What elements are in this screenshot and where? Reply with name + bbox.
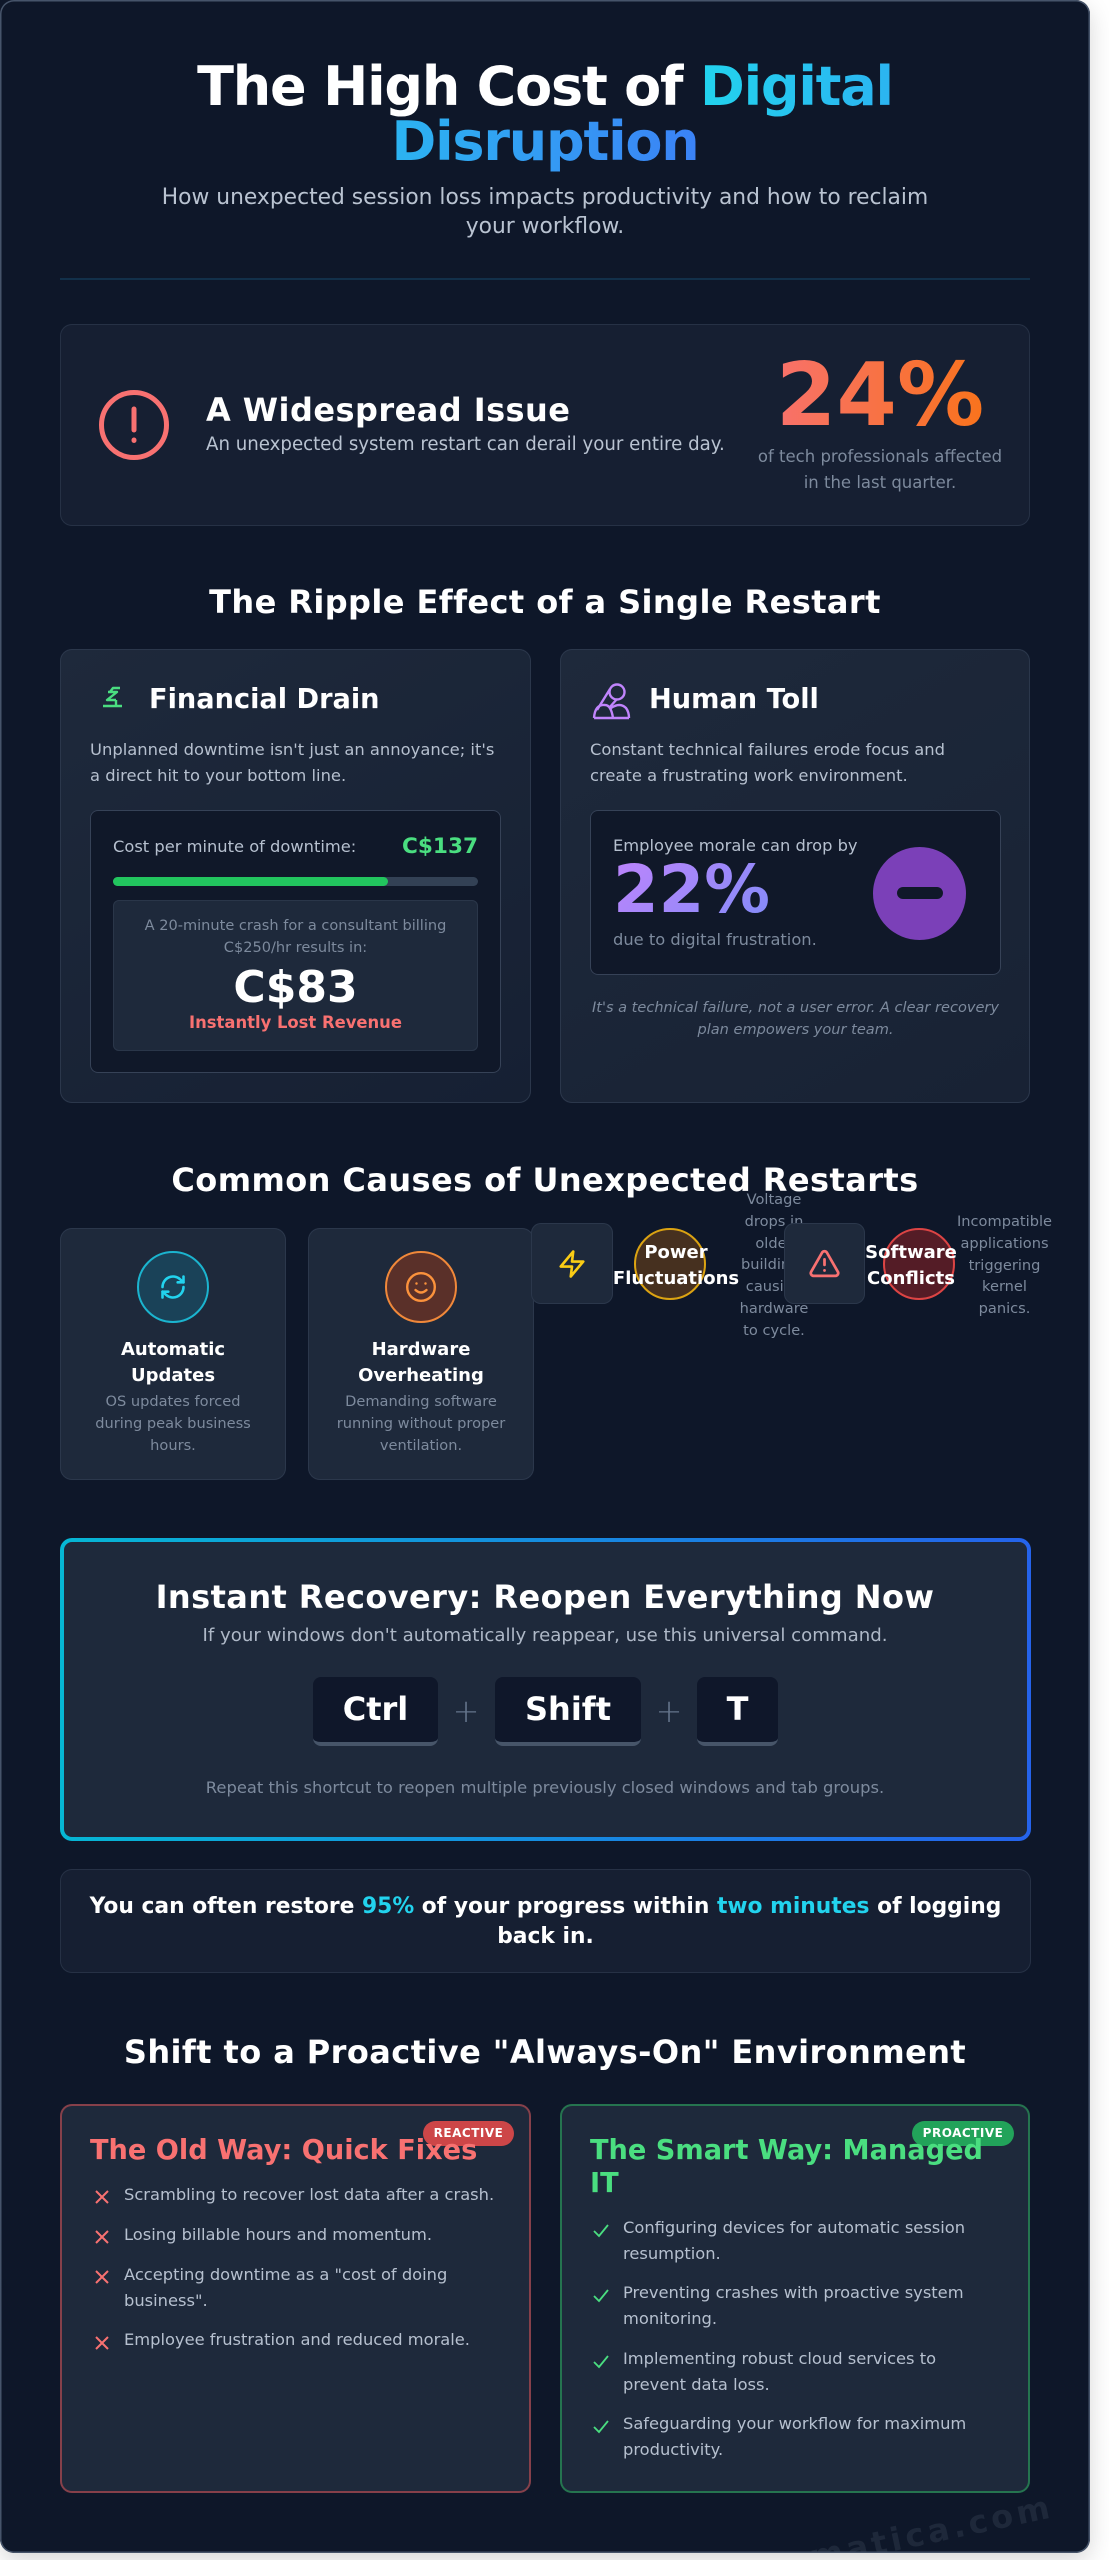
text: item: Accepting downtime as a "cost of doing bbox=[124, 2265, 447, 2284]
panel: morale stat bbox=[590, 810, 1001, 975]
text: hardware overheating description: Demanding software bbox=[345, 1393, 497, 1410]
panel: crash example bbox=[113, 900, 478, 1051]
text: recovery note: plan empowers your team. bbox=[697, 1021, 894, 1038]
text: item: Losing billable hours and momentum. bbox=[124, 2225, 432, 2244]
text: software conflicts description: triggering bbox=[969, 1257, 1040, 1274]
text: power fluctuations title: Fluctuations bbox=[613, 1268, 739, 1289]
text: automatic updates title bbox=[121, 1339, 225, 1386]
text: software conflicts description bbox=[957, 1213, 1052, 1317]
heading: the smart way bbox=[590, 2135, 983, 2199]
icon: lightning bbox=[559, 1250, 585, 1278]
heading: proactive environment: Shift to a Proactive "Always-On" Environment bbox=[124, 2033, 966, 2071]
stat: 24 percent: 24% bbox=[776, 344, 984, 446]
text: item: Configuring devices for automatic session bbox=[623, 2218, 965, 2237]
text: item bbox=[623, 2414, 966, 2459]
text: power fluctuations title bbox=[613, 1242, 739, 1289]
text: software conflicts description: applications bbox=[960, 1235, 1049, 1252]
badge: reactive: REACTIVE bbox=[434, 2126, 503, 2140]
text: recovery note: It's a technical failure, not a user error. A clear recovery bbox=[592, 999, 999, 1016]
text: item: productivity. bbox=[623, 2440, 723, 2459]
text: stat caption bbox=[758, 447, 1002, 492]
stat: 22 percent: 22% bbox=[613, 852, 770, 928]
text: item: resumption. bbox=[623, 2244, 721, 2263]
text: power fluctuations description: older bbox=[755, 1235, 793, 1252]
text: power fluctuations description: to cycle. bbox=[743, 1322, 805, 1339]
text: software conflicts description: panics. bbox=[979, 1300, 1030, 1317]
text: power fluctuations description: causing bbox=[746, 1278, 802, 1295]
text: crash scenario bbox=[144, 917, 446, 956]
plus sign: + bbox=[453, 1692, 479, 1730]
text: hardware overheating title bbox=[358, 1339, 484, 1386]
key: Ctrl: Ctrl bbox=[343, 1690, 408, 1728]
icon: refresh bbox=[137, 1251, 209, 1323]
panel: downtime cost bbox=[90, 810, 501, 1073]
plus sign: + bbox=[656, 1692, 682, 1730]
heading: human toll: Human Toll bbox=[649, 684, 819, 715]
text: item bbox=[623, 2283, 964, 2328]
stat: C$137 per minute: C$137 bbox=[402, 834, 478, 859]
text: power fluctuations title: Power bbox=[644, 1242, 708, 1263]
text: software conflicts description: Incompatible bbox=[957, 1213, 1052, 1230]
heading: a widespread issue: A Widespread Issue bbox=[206, 391, 570, 429]
stat: C$83: C$83 bbox=[233, 962, 358, 1013]
icon: check bbox=[593, 2224, 609, 2238]
text: progress statement: You can often restore 95% of your progress within two minutes of logging bbox=[90, 1894, 1001, 1919]
text: morale label: Employee morale can drop by bbox=[613, 836, 858, 855]
heading: the old way: The Old Way: Quick Fixes bbox=[90, 2135, 477, 2166]
icon: financial scale bbox=[103, 686, 122, 708]
panel: the smart way bbox=[560, 2104, 1030, 2493]
text: financial description: Unplanned downtime isn't just an annoyance; it's bbox=[90, 740, 494, 759]
text: power fluctuations description: hardware bbox=[740, 1300, 808, 1317]
badge: reactive bbox=[423, 2121, 514, 2146]
badge: proactive: PROACTIVE bbox=[923, 2126, 1003, 2140]
text: recovery instruction: If your windows don't automatically reappear, use this universal command. bbox=[203, 1625, 887, 1646]
key: T bbox=[697, 1677, 778, 1746]
text: item: Implementing robust cloud services to bbox=[623, 2349, 936, 2368]
text: automatic updates description: during peak business bbox=[95, 1415, 251, 1432]
title: The High Cost of Digital bbox=[197, 55, 893, 118]
text: crash scenario: C$250/hr results in: bbox=[224, 939, 367, 956]
icon: person bbox=[592, 683, 630, 720]
icon: software circle bbox=[883, 1228, 955, 1300]
panel: power fluctuations tile bbox=[531, 1223, 613, 1304]
text: item: monitoring. bbox=[623, 2309, 717, 2328]
text: automatic updates description: OS updates forced bbox=[105, 1393, 241, 1410]
text: stat caption: in the last quarter. bbox=[804, 473, 956, 492]
text: hardware overheating title: Overheating bbox=[358, 1365, 484, 1386]
key: Shift bbox=[495, 1677, 641, 1746]
text: human toll description: Constant technical failures erode focus and bbox=[590, 740, 945, 759]
text: automatic updates title: Automatic bbox=[121, 1339, 225, 1360]
text: stat caption: of tech professionals affected bbox=[758, 447, 1002, 466]
text: recovery note bbox=[592, 999, 999, 1038]
text: automatic updates description: hours. bbox=[150, 1437, 196, 1454]
text: human toll description bbox=[590, 740, 945, 785]
text: lost revenue label: Instantly Lost Revenue bbox=[189, 1013, 402, 1032]
text: power fluctuations description: drops in bbox=[745, 1213, 803, 1230]
text: hardware overheating description: ventilation. bbox=[380, 1437, 462, 1454]
text: progress statement: back in. bbox=[497, 1924, 594, 1948]
text: software conflicts title bbox=[865, 1242, 957, 1289]
icon: check bbox=[593, 2420, 609, 2434]
text: item: Preventing crashes with proactive system bbox=[623, 2283, 964, 2302]
text: software conflicts title: Conflicts bbox=[867, 1268, 955, 1289]
subtitle bbox=[162, 185, 928, 239]
text: software conflicts description: kernel bbox=[982, 1278, 1027, 1295]
text: cost per minute label: Cost per minute of downtime: bbox=[113, 837, 356, 856]
text: item bbox=[124, 2265, 447, 2310]
progress bar bbox=[113, 877, 478, 886]
text: human toll description: create a frustrating work environment. bbox=[590, 766, 908, 785]
text: software conflicts title: Software bbox=[865, 1242, 957, 1263]
panel: software conflicts tile bbox=[784, 1223, 865, 1304]
icon: power circle bbox=[634, 1228, 706, 1300]
heading: the smart way: The Smart Way: Managed bbox=[590, 2135, 983, 2166]
icon: x bbox=[95, 2336, 109, 2350]
heading: financial drain: Financial Drain bbox=[149, 684, 380, 715]
text: power fluctuations description bbox=[740, 1191, 808, 1339]
text: issue description: An unexpected system restart can derail your entire day. bbox=[206, 434, 725, 455]
icon: check bbox=[593, 2355, 609, 2368]
text: automatic updates title: Updates bbox=[131, 1365, 215, 1386]
panel: financial drain bbox=[60, 649, 531, 1103]
text: financial description: a direct hit to your bottom line. bbox=[90, 766, 346, 785]
icon: x bbox=[95, 2190, 109, 2204]
badge: proactive bbox=[912, 2121, 1014, 2146]
list: smart way items bbox=[593, 2218, 966, 2459]
heading: the smart way: IT bbox=[590, 2168, 619, 2199]
key: Ctrl bbox=[313, 1677, 438, 1746]
icon: alert circle bbox=[99, 390, 169, 460]
panel: the old way bbox=[60, 2104, 531, 2493]
text: item: Safeguarding your workflow for maximum bbox=[623, 2414, 966, 2433]
panel: a widespread issue bbox=[60, 324, 1030, 526]
text: item bbox=[623, 2218, 965, 2263]
text: item: business". bbox=[124, 2291, 208, 2310]
icon: minus circle bbox=[873, 847, 966, 940]
heading: instant recovery: Instant Recovery: Reopen Everything Now bbox=[156, 1578, 934, 1616]
panel: human toll bbox=[560, 649, 1030, 1103]
text: hardware overheating title: Hardware bbox=[372, 1339, 470, 1360]
panel: automatic updates bbox=[60, 1228, 286, 1480]
text: progress statement bbox=[90, 1894, 1001, 1948]
key: Shift: Shift bbox=[525, 1690, 611, 1728]
heading: ripple effect: The Ripple Effect of a Single Restart bbox=[209, 583, 881, 621]
text: financial description bbox=[90, 740, 494, 785]
text: power fluctuations description: buildings bbox=[741, 1256, 807, 1273]
title bbox=[197, 55, 893, 173]
list: old way items bbox=[95, 2185, 494, 2350]
heading: common causes: Common Causes of Unexpected Restarts bbox=[171, 1161, 919, 1199]
text: automatic updates description bbox=[95, 1393, 251, 1454]
panel: hardware overheating bbox=[308, 1228, 534, 1480]
subtitle: How unexpected session loss impacts productivity and how to reclaim bbox=[162, 185, 928, 210]
text: crash scenario: A 20-minute crash for a consultant billing bbox=[145, 917, 446, 934]
icon: check bbox=[593, 2289, 609, 2302]
text: morale caption: due to digital frustration. bbox=[613, 930, 817, 949]
subtitle: your workflow. bbox=[466, 214, 624, 239]
text: hardware overheating description bbox=[337, 1393, 506, 1454]
icon: smile bbox=[385, 1251, 457, 1323]
icon: warning triangle bbox=[809, 1250, 840, 1278]
key: T: T bbox=[727, 1690, 748, 1728]
text: power fluctuations description: Voltage bbox=[747, 1191, 801, 1208]
icon: x bbox=[95, 2230, 109, 2244]
text: shortcut note: Repeat this shortcut to reopen multiple previously closed windows and tab groups. bbox=[206, 1778, 884, 1797]
text: item bbox=[623, 2349, 936, 2394]
panel: instant recovery bbox=[60, 1538, 1031, 1841]
icon: x bbox=[95, 2270, 109, 2284]
title: Disruption bbox=[391, 110, 699, 173]
text: hardware overheating description: running without proper bbox=[337, 1415, 505, 1432]
text: item: Scrambling to recover lost data after a crash. bbox=[124, 2185, 494, 2204]
text: item: Employee frustration and reduced morale. bbox=[124, 2330, 470, 2349]
callout: progress restored bbox=[60, 1869, 1031, 1973]
text: item: prevent data loss. bbox=[623, 2375, 770, 2394]
